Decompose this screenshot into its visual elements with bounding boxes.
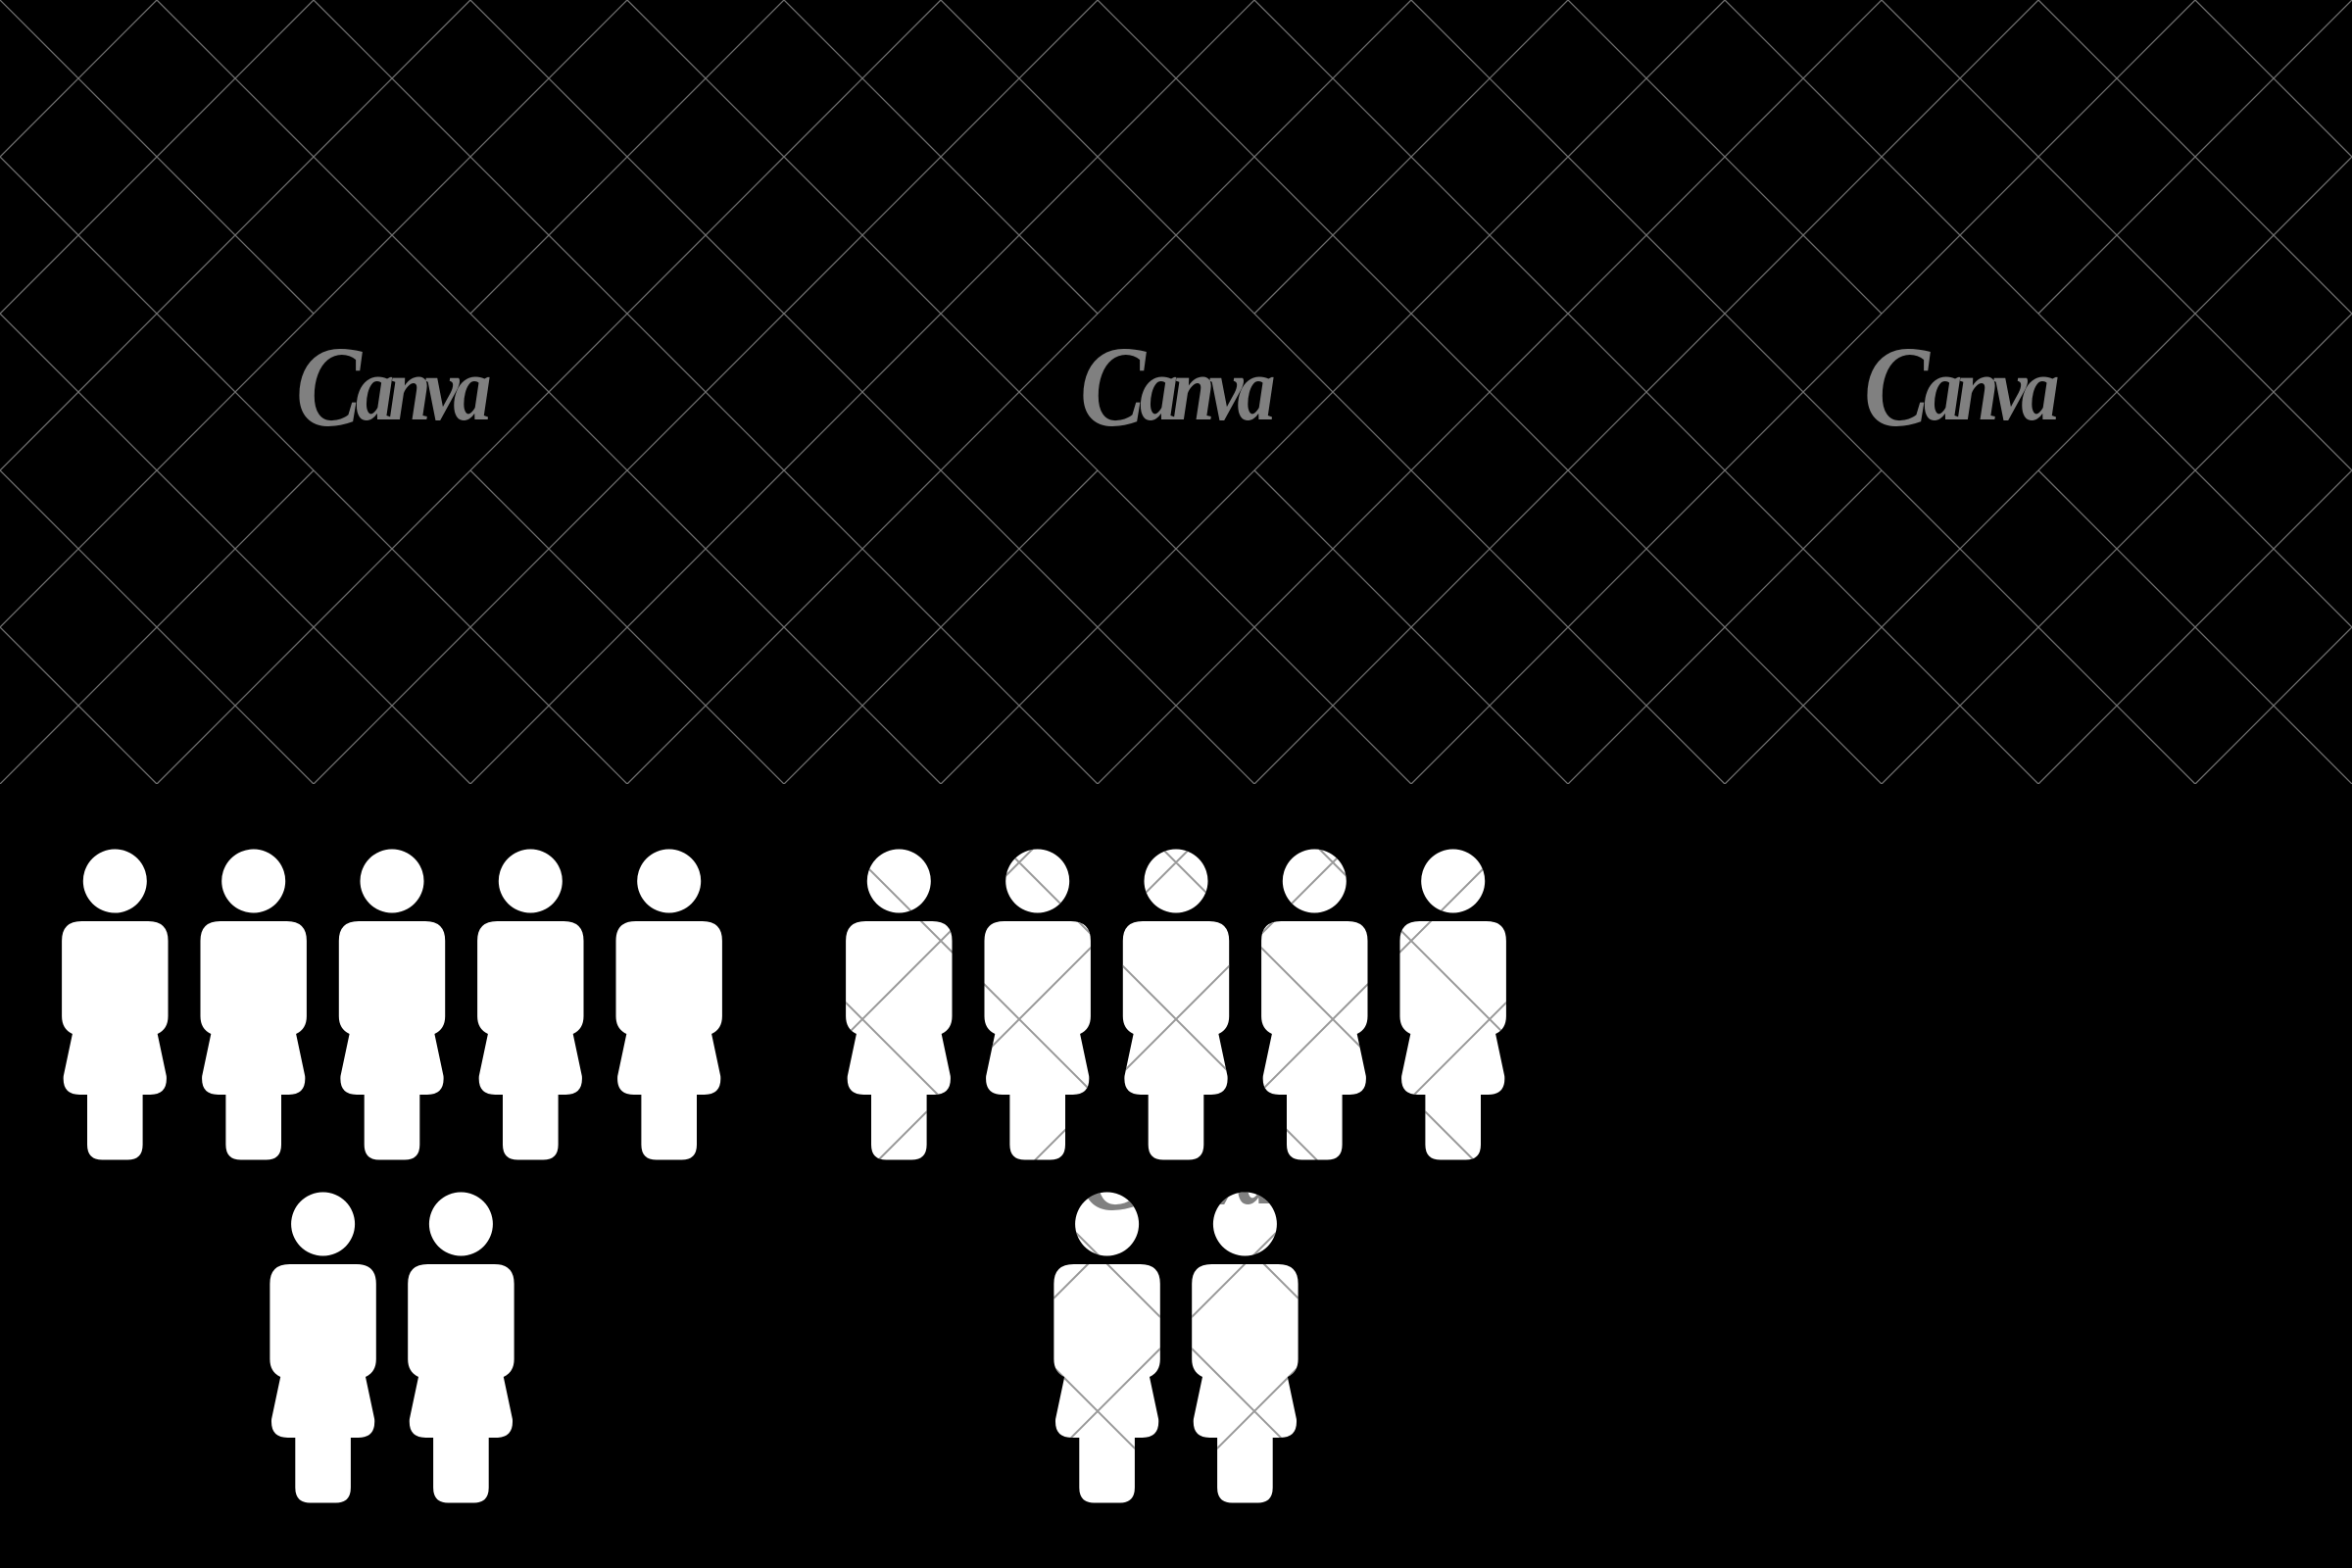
icon: woman 2: [201, 849, 307, 1160]
icon: woman 1: [62, 849, 168, 1160]
pictogram: left group of seven women: [62, 849, 722, 1503]
pictogram: right group of seven women: [846, 849, 1506, 1503]
icon: woman 1: [846, 849, 953, 1160]
icon: woman 5: [615, 849, 722, 1160]
watermark showing through the right group: [846, 849, 1506, 1450]
icon: woman 2: [984, 849, 1091, 1160]
icon: woman 3: [339, 849, 445, 1160]
icon: woman 4: [477, 849, 584, 1160]
watermark logo: centre: C: [1080, 321, 1148, 451]
watermark logo: centre: anva: [1140, 340, 1274, 439]
icon: woman 4: [1261, 849, 1368, 1160]
watermark logo: clipped by figures: C: [1080, 1105, 1148, 1235]
watermark tile: left: [0, 0, 784, 784]
watermark tile: centre: [784, 0, 1568, 784]
icon: woman 5: [1399, 849, 1506, 1160]
icon: woman 6: [1054, 1192, 1160, 1503]
icon: woman 7: [408, 1192, 514, 1503]
icon: woman 7: [1192, 1192, 1298, 1503]
watermark logo: left: anva: [356, 340, 490, 439]
watermark logo: right: C: [1864, 321, 1932, 451]
icon: woman 3: [1123, 849, 1229, 1160]
icon: woman 6: [270, 1192, 376, 1503]
watermark logo: right: anva: [1924, 340, 2058, 439]
watermark logo: clipped by figures: anva: [1140, 1124, 1274, 1223]
watermark logo: left: C: [296, 321, 364, 451]
watermark panel: top row: [0, 0, 2352, 784]
watermark tile: right: [1568, 0, 2352, 784]
